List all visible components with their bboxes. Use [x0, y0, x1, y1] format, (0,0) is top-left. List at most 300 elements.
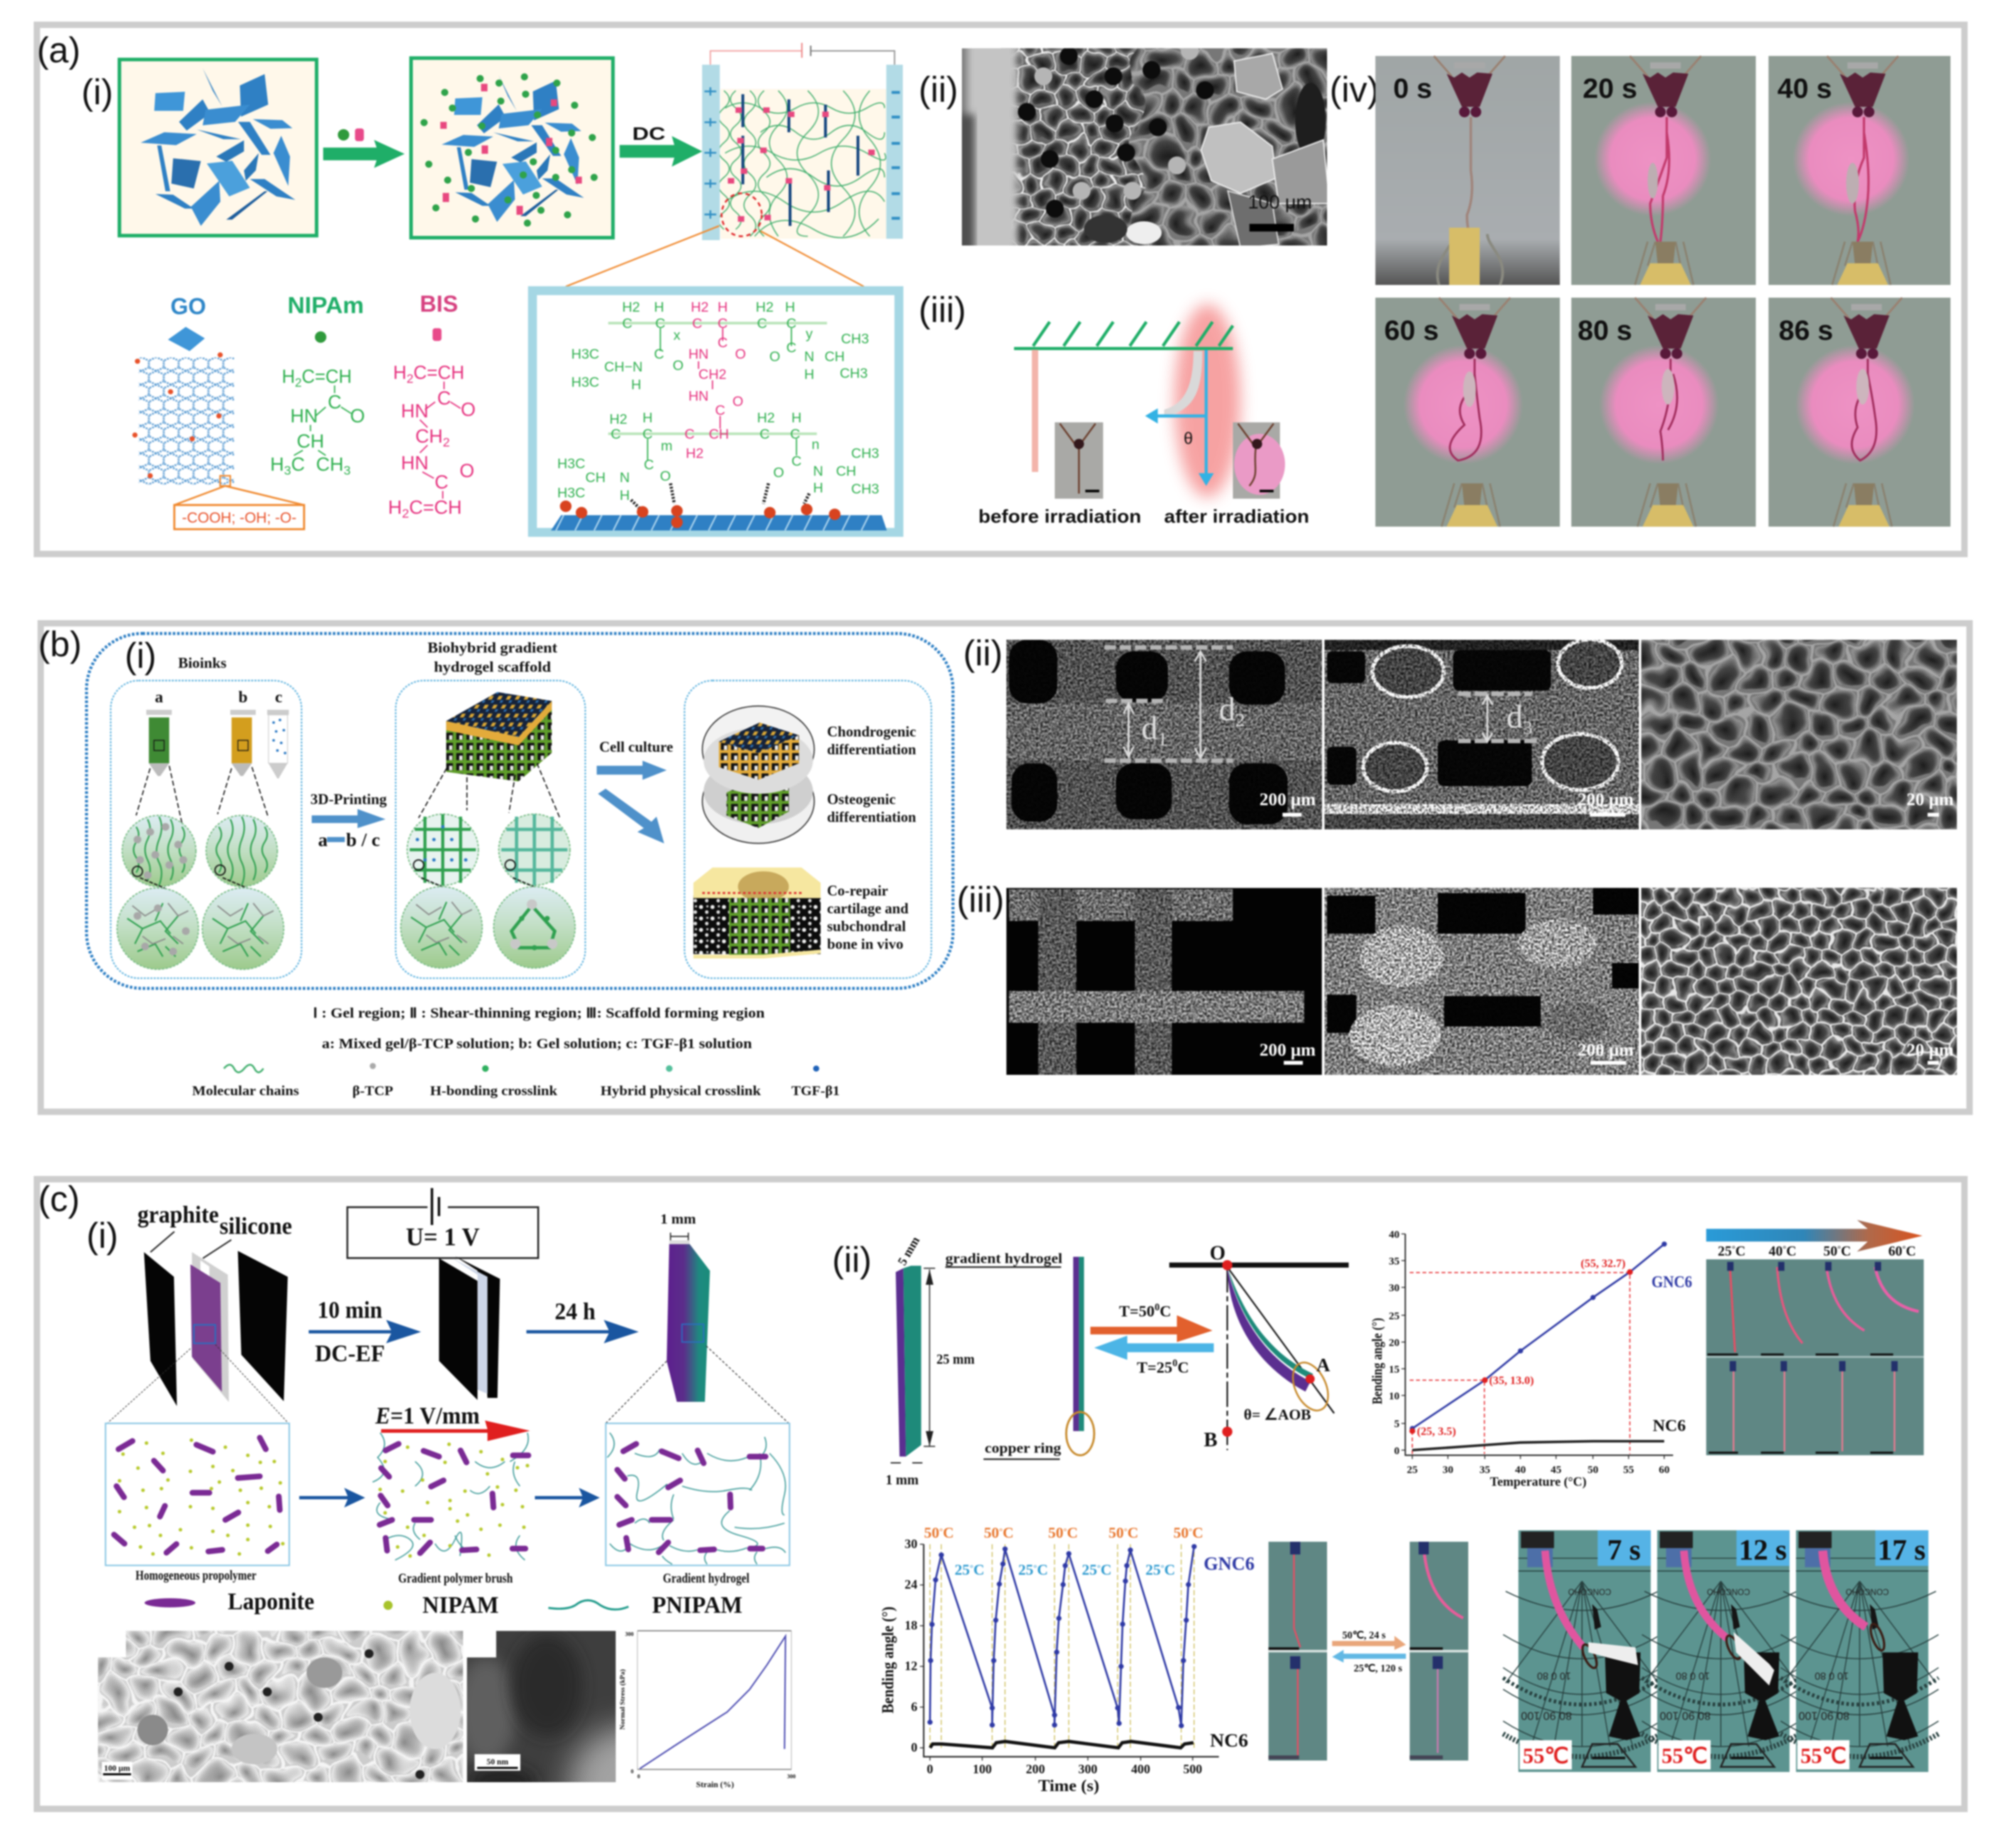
specimen dimensions: [885, 1234, 975, 1488]
arrows: heating and cooling: [1090, 1301, 1214, 1376]
box: crosslinked network on GO sheet: H3C: [557, 485, 585, 501]
diagram: bending under irradiation: [1014, 304, 1285, 499]
scaffold box: [396, 680, 585, 978]
box: crosslinked network on GO sheet: CH: [836, 464, 856, 480]
box: crosslinked network on GO sheet: HN: [688, 389, 709, 404]
stress-strain chart: Strain (%): [696, 1780, 734, 1790]
line chart: cyclic bending angle over time: 400: [1131, 1762, 1150, 1776]
line chart: bending angle vs temperature: 45: [1551, 1464, 1562, 1476]
arrows: heating and cooling: C: [1177, 1358, 1189, 1376]
line chart: cyclic bending angle over time: NC6: [1210, 1729, 1248, 1751]
box: crosslinked network on GO sheet: C: [717, 316, 727, 332]
callout: oxygen functional groups: [174, 505, 304, 529]
line chart: bending angle vs temperature: 55: [1623, 1464, 1634, 1476]
panel a frame: [37, 25, 1964, 554]
arrows: heating and cooling: T=50: [1119, 1302, 1154, 1320]
sub-panel iv label: (iv): [1330, 70, 1379, 110]
structure: BIS: CH: [415, 426, 443, 447]
photo: 20 s: 20 s: [1583, 73, 1637, 105]
box: GO flakes dispersion: [120, 60, 317, 236]
SEM image: scaffold cross-section with dimension: 3: [1523, 717, 1532, 738]
line chart: cyclic bending angle over time: °: [999, 1526, 1003, 1536]
box: crosslinked network on GO sheet: C: [790, 427, 800, 443]
caption: before irradiation: before irradiation: [979, 507, 1142, 527]
photo: 86 s: [1769, 297, 1950, 527]
bending geometry diagram: A: [1316, 1354, 1330, 1376]
arrows: heating and cooling: 0: [1154, 1301, 1159, 1313]
box: crosslinked network on GO sheet: C: [685, 427, 695, 443]
arrows: cell culture: [596, 738, 673, 843]
line chart: cyclic bending angle over time: 24: [905, 1578, 917, 1592]
callout: oxygen functional groups: -COOH; -OH; -O-: [182, 509, 297, 527]
label: 24 h: 24 h: [554, 1299, 596, 1325]
panel b: 3D printed gradient scaffold: [38, 617, 1985, 1112]
line chart: cyclic bending angle over time: C: [1003, 1524, 1014, 1541]
box: crosslinked network on GO sheet: C: [717, 335, 727, 351]
temperature labels: C: [1786, 1243, 1796, 1259]
text: co-repair: cartilage and: [827, 900, 908, 917]
box: crosslinked network on GO sheet: C: [644, 458, 654, 473]
bending geometry diagram: O: [1210, 1242, 1226, 1264]
TEM image: [465, 1630, 617, 1783]
box: crosslinked network on GO sheet: H: [804, 367, 814, 383]
label: BIS: BIS: [420, 291, 458, 317]
gradient hydrogel sheet: 1 mm: [660, 1212, 696, 1227]
box: crosslinked network on GO sheet: C: [643, 427, 653, 443]
box: crosslinked network on GO sheet: H3C: [557, 456, 585, 472]
icon: BIS block: [433, 328, 441, 341]
box: crosslinked network on GO sheet: HN: [688, 347, 709, 362]
temperature labels: °: [1838, 1244, 1841, 1254]
box: crosslinked network on GO sheet: x: [673, 327, 680, 343]
box: crosslinked network on GO sheet: CH−N: [604, 359, 643, 375]
assembly: graphite plates and silicone mould: [108, 1232, 288, 1422]
legend: solutions: a: Mixed gel/β-TCP solution; b: Gel solution; c: TGF-β1 solution: [322, 1036, 752, 1052]
structure: NIPAm: C: [291, 453, 305, 475]
structure: BIS: 2: [406, 371, 414, 386]
line chart: cyclic bending angle over time: C: [1127, 1524, 1138, 1541]
structure: NIPAm: 3: [284, 463, 291, 477]
line chart: cyclic bending angle over time: 50: [1174, 1524, 1189, 1541]
box: crosslinked network on GO sheet: CH: [585, 470, 606, 486]
line chart: bending angle vs temperature: 30: [1443, 1464, 1453, 1476]
SEM image: scaffold top view with dimensions: d: [1219, 692, 1236, 728]
panel a label: (a): [37, 31, 80, 70]
line chart: bending angle vs temperature: (35, 13.0): [1489, 1375, 1534, 1387]
photo: 12 s at 55 C: [1642, 1531, 1800, 1772]
line chart: bending angle vs temperature: 40: [1389, 1228, 1400, 1240]
temperature labels: 60: [1888, 1243, 1902, 1259]
box: crosslinked network on GO sheet: H3C: [572, 347, 599, 362]
box: crosslinked network on GO sheet: O: [660, 469, 671, 485]
line chart: cyclic bending angle over time: °: [939, 1526, 943, 1536]
line chart: bending angle vs temperature: 5: [1394, 1418, 1400, 1430]
stress-strain chart: 300: [787, 1773, 796, 1780]
line chart: bending angle vs temperature: 0: [1394, 1445, 1400, 1457]
temperature labels: C: [1841, 1243, 1851, 1259]
box: crosslinked network on GO sheet: H2: [685, 446, 704, 462]
line chart: cyclic bending angle over time: C: [1067, 1524, 1078, 1541]
SEM image: scaffold cross-section (iii): [1325, 888, 1638, 1075]
bending geometry diagram: θ= ∠AOB: [1244, 1406, 1311, 1423]
structure: BIS: O: [460, 460, 474, 481]
legend: Laponite, NIPAM, PNIPAM: [144, 1588, 742, 1619]
SEM image: pores (iii): 20 μm: [1907, 1041, 1954, 1060]
text: osteogenic differentiation: [827, 791, 916, 825]
line chart: cyclic bending angle over time: 25: [954, 1561, 970, 1578]
box: crosslinked network on GO sheet: H: [643, 410, 653, 426]
box: crosslinked network on GO sheet: C: [693, 316, 702, 332]
line chart: bending angle vs temperature: NC6: [1653, 1417, 1686, 1435]
caption: Homogeneous propolymer: Homogeneous propolymer: [135, 1568, 256, 1583]
structure: NIPAm: 3: [344, 463, 351, 477]
structure: BIS: 2: [402, 507, 409, 521]
SEM image: scaffold top view (iii): 200 μm: [1260, 1041, 1316, 1060]
box: crosslinked network on GO sheet: y: [806, 327, 813, 342]
box: crosslinked network on GO sheet: O: [673, 358, 683, 374]
line chart: cyclic bending angle over time: C: [1164, 1561, 1175, 1578]
text: co-repair: bone in vivo: [827, 936, 903, 953]
line chart: cyclic bending angle over time: 18: [905, 1618, 917, 1632]
line chart: cyclic bending angle over time: C: [943, 1524, 954, 1541]
line chart: bending angle vs temperature: Temperature (°C): [1490, 1474, 1586, 1489]
label: E = 1 V/mm: E=1 V/mm: [374, 1403, 480, 1429]
line chart: cyclic bending angle over time: 200: [1026, 1762, 1045, 1776]
arrows: cell culture: Cell culture: [599, 738, 673, 755]
box: crosslinked network on GO sheet: C: [715, 403, 725, 418]
SEM image: scaffold top view with dimensions: d: [1142, 711, 1158, 747]
arrow: 3D printing: a: [318, 829, 327, 850]
line chart: bending angle vs temperature: 25: [1407, 1464, 1418, 1476]
photos: hot strips: [1410, 1542, 1468, 1760]
box: crosslinked network on GO sheet: CH3: [840, 366, 868, 381]
box: crosslinked network on GO sheet: H: [791, 410, 801, 426]
gradient hydrogel sheet: [606, 1212, 789, 1423]
caption: after irradiation: after irradiation: [1164, 507, 1309, 527]
box: crosslinked network on GO sheet: CH2: [698, 367, 727, 383]
line chart: bending angle vs temperature: [1369, 1228, 1693, 1489]
legend: Laponite, NIPAM, PNIPAM: PNIPAM: [652, 1593, 742, 1619]
box: crosslinked network on GO sheet: H: [813, 480, 823, 496]
sub-panel ii label: (ii): [919, 70, 958, 110]
temperature labels: 50: [1823, 1243, 1838, 1259]
line chart: bending angle vs temperature: 60: [1659, 1464, 1670, 1476]
structure: BIS: H: [388, 497, 402, 518]
box: crosslinked network on GO sheet: N: [813, 464, 823, 480]
structure: BIS: O: [460, 399, 475, 421]
heading: Biohybrid gradient hydrogel scaffold: [428, 639, 558, 675]
photo: 7 s at 55 C: 7 s: [1607, 1533, 1641, 1566]
box: crosslinked network on GO sheet: H2: [691, 300, 709, 315]
SEM image: gradient hydrogel: [97, 1630, 464, 1783]
line chart: bending angle vs temperature: 35: [1389, 1255, 1400, 1267]
line chart: cyclic bending angle over time: 6: [911, 1699, 917, 1714]
structure: BIS: HN: [401, 400, 428, 421]
sub-panel ii label: (ii): [963, 633, 1003, 673]
temperature labels: 25: [1718, 1243, 1732, 1259]
heading: Biohybrid gradient hydrogel scaffold: hydrogel scaffold: [434, 658, 551, 675]
structure: BIS: C=CH: [409, 497, 462, 518]
sub-panel iii label: (iii): [957, 880, 1004, 920]
line chart: cyclic bending angle over time: 0: [911, 1741, 917, 1755]
text: osteogenic differentiation: Osteogenic: [827, 791, 895, 808]
label: NIPAm: NIPAm: [288, 292, 364, 318]
photo: 17 s at 55 C: 17 s: [1878, 1533, 1925, 1566]
legend: components: H-bonding crosslink: [430, 1084, 558, 1099]
box: crosslinked network on GO sheet: H: [785, 300, 795, 315]
icon: GO flake: [168, 327, 205, 351]
box: crosslinked network on GO sheet: CH3: [851, 482, 879, 497]
line chart: cyclic bending angle over time: 50: [924, 1524, 939, 1541]
specimen dimensions: 1 mm: [885, 1472, 919, 1488]
box: crosslinked network on GO sheet: C: [654, 347, 664, 362]
text: chondrogenic differentiation: differentiation: [827, 741, 916, 758]
SEM image: scaffold top view with dimensions: 1: [1158, 729, 1167, 750]
line chart: bending angle vs temperature: 25: [1389, 1310, 1400, 1322]
stress-strain chart: Normal Stress (kPa): [619, 1669, 627, 1730]
stress-strain chart: 0: [637, 1773, 640, 1780]
line chart: cyclic bending angle over time: °: [1033, 1563, 1037, 1573]
SEM image: GO gradient hydrogel cross-section: 100 μm: [1248, 191, 1312, 213]
arrow: 3D printing: 3D-Printing: [310, 791, 387, 808]
line chart: cyclic bending angle over time: °: [1063, 1526, 1067, 1536]
specimen dimensions: 25 mm: [937, 1351, 975, 1367]
arrows: 50 C 24 s / 25 C 120 s: 25℃, 120 s: [1354, 1663, 1402, 1674]
box: crosslinked network on GO sheet: O: [735, 347, 746, 362]
legend: components: Molecular chains: [192, 1084, 299, 1099]
line chart: cyclic bending angle over time: 25: [1082, 1561, 1097, 1578]
line chart: cyclic bending angle over time: °: [1189, 1526, 1192, 1536]
bending geometry diagram: [1169, 1242, 1349, 1452]
SEM image: scaffold top view with dimensions: 200 μm: [1260, 791, 1316, 810]
photo: 40 s: [1769, 56, 1950, 285]
SEM image: scaffold top view with dimensions: 2: [1236, 709, 1245, 731]
sub-panel i label: (i): [81, 73, 113, 112]
legend: components: β-TCP: [352, 1084, 393, 1099]
line chart: bending angle vs temperature: 35: [1480, 1464, 1490, 1476]
inset: gradient hydrogel: [606, 1423, 789, 1565]
arrow: 3D printing: [310, 791, 387, 850]
label: graphite: graphite: [137, 1202, 219, 1228]
sub-panel ii label: (ii): [832, 1240, 872, 1280]
structure: NIPAm: C: [327, 391, 342, 413]
label: 10 min: 10 min: [317, 1297, 382, 1324]
structure: BIS: H: [393, 362, 407, 384]
line chart: cyclic bending angle over time: 50: [1109, 1524, 1124, 1541]
stress-strain chart: 0: [631, 1768, 633, 1775]
structure: BIS: 2: [443, 435, 450, 449]
panel c frame: [37, 1179, 1964, 1809]
box: crosslinked network on GO sheet: N: [620, 470, 630, 486]
diagram: bending under irradiation: θ: [1184, 429, 1193, 448]
structure: BIS: C: [437, 387, 451, 408]
box: crosslinked network on GO sheet: C: [786, 340, 796, 356]
arrow: DC field: [620, 125, 702, 167]
stress-strain chart: [619, 1631, 796, 1790]
bioinks box: b: [238, 688, 248, 707]
panel b frame: [41, 623, 1969, 1112]
arrow: 24 h: [527, 1320, 638, 1343]
structure: NIPAm: O: [350, 405, 365, 426]
line chart: cyclic bending angle over time: C: [1100, 1561, 1112, 1578]
SEM image: scaffold cross-section with dimension: d: [1507, 699, 1523, 736]
photo: 80 s: 80 s: [1578, 315, 1632, 346]
line chart: cyclic bending angle over time: 12: [905, 1659, 917, 1673]
photo: 17 s at 55 C: [1781, 1531, 1939, 1772]
line chart: cyclic bending angle over time: 50: [1048, 1524, 1063, 1541]
heading: Biohybrid gradient hydrogel scaffold: Biohybrid gradient: [428, 639, 558, 656]
text: co-repair: subchondral: [827, 918, 906, 935]
line chart: cyclic bending angle over time: C: [1192, 1524, 1204, 1541]
photo: 60 s: [1375, 297, 1560, 527]
temperature labels: °: [1902, 1244, 1906, 1254]
photo: 0 s: [1375, 56, 1560, 285]
box: crosslinked network on GO sheet: H2: [609, 411, 627, 427]
temperature labels: 40: [1769, 1243, 1783, 1259]
line chart: bending angle vs temperature: (25, 3.5): [1417, 1425, 1456, 1437]
outcome box: [685, 680, 932, 978]
arrows: heating and cooling: T=25: [1137, 1358, 1172, 1376]
box: crosslinked network on GO sheet: C: [759, 427, 769, 443]
box: crosslinked network on GO sheet: m: [661, 438, 673, 454]
line chart: cyclic bending angle over time: 100: [973, 1762, 992, 1776]
line chart: bending angle vs temperature: Bending angle (°): [1369, 1318, 1385, 1405]
box: crosslinked network on GO sheet: N: [804, 349, 814, 365]
panel c: electric-field gradient hydrogel: [37, 1179, 1964, 1848]
box: crosslinked network on GO sheet: CH: [709, 427, 729, 443]
hydrogel strip with copper ring: [945, 1251, 1094, 1460]
line chart: cyclic bending angle over time: 300: [1078, 1762, 1097, 1776]
arrow: 10 min DC-EF: [309, 1320, 421, 1343]
arrow: 3D printing: b / c: [346, 829, 380, 850]
legend: regions: Ⅰ : Gel region; Ⅱ : Shear-thinning region; Ⅲ: Scaffold forming region: [313, 1005, 764, 1021]
bending geometry diagram: B: [1204, 1430, 1217, 1452]
outer dotted frame: [87, 633, 953, 988]
SEM image: gradient hydrogel: 100 μm: [104, 1763, 130, 1773]
text: osteogenic differentiation: differentiation: [827, 808, 916, 825]
electrode cell with gradient network: [566, 43, 902, 287]
photo: 12 s at 55 C: 55℃: [1662, 1744, 1707, 1768]
label: silicone: silicone: [219, 1213, 292, 1240]
icon: NIPAm ball: [315, 332, 327, 343]
circuit: U = 1 V: [347, 1188, 538, 1258]
photo: 12 s at 55 C: 12 s: [1739, 1533, 1786, 1566]
sub-panel iii label: (iii): [919, 290, 966, 329]
panel c label: (c): [38, 1179, 80, 1219]
box: crosslinked network on GO sheet: C: [622, 316, 632, 332]
box: crosslinked network on GO sheet: H3C: [572, 374, 599, 390]
line chart: cyclic bending angle over time: °: [970, 1563, 974, 1573]
panel a: hydrogel fabrication and actuation: [37, 25, 1964, 554]
arrow: temperature gradient: [1706, 1220, 1922, 1252]
legend: components: [192, 1063, 840, 1099]
label: GO: GO: [171, 294, 206, 320]
arrow: add monomer: [323, 129, 404, 168]
hydrogel strip with copper ring: gradient hydrogel: [945, 1251, 1063, 1267]
SEM image: scaffold top view (iii): [1006, 888, 1322, 1075]
photo: 17 s at 55 C: 55℃: [1801, 1744, 1846, 1768]
specimen dimensions: 5 mm: [895, 1234, 922, 1268]
arrows: 50 C 24 s / 25 C 120 s: [1332, 1630, 1406, 1674]
box: crosslinked network on GO sheet: H: [654, 300, 664, 315]
box: crosslinked network on GO sheet: H: [620, 488, 630, 504]
box: crosslinked network on GO sheet: O: [773, 465, 784, 480]
heading: Bioinks: Bioinks: [178, 655, 226, 672]
TEM image: 50 nm: [487, 1757, 509, 1766]
line chart: cyclic bending angle over time: C: [1037, 1561, 1048, 1578]
box: crosslinked network on GO sheet: CH: [824, 349, 845, 365]
box: crosslinked network on GO sheet: H2: [756, 300, 774, 315]
SEM image: scaffold cross-section with dimension: [1325, 640, 1638, 830]
box: crosslinked network on GO sheet: H: [717, 300, 727, 315]
structure: BIS: C: [435, 471, 448, 492]
box: crosslinked network on GO sheet: O: [732, 394, 743, 409]
box: crosslinked network on GO sheet: n: [811, 437, 819, 453]
line chart: cyclic bending angle over time: Time (s): [1038, 1777, 1100, 1795]
box: crosslinked network on GO sheet: CH3: [851, 446, 879, 462]
text: co-repair: [827, 882, 908, 953]
arrow: DC field: DC: [632, 125, 665, 144]
box: crosslinked network on GO sheet: H2: [622, 300, 640, 315]
box: crosslinked network on GO sheet: C: [656, 316, 665, 332]
photo: 60 s: 60 s: [1384, 315, 1438, 346]
bioinks box: c: [275, 688, 283, 707]
temperature labels: C: [1906, 1243, 1916, 1259]
line chart: cyclic bending angle over time: 25: [1018, 1561, 1033, 1578]
photo: 40 s: 40 s: [1777, 73, 1832, 105]
box: crosslinked network on GO sheet: [532, 290, 899, 532]
SEM image: scaffold top view with dimensions: [1006, 640, 1322, 830]
structure: NIPAm: CH: [297, 431, 325, 452]
line chart: cyclic bending angle over time: °: [1097, 1563, 1100, 1573]
line chart: bending angle vs temperature: 50: [1588, 1464, 1599, 1476]
SEM image: scaffold cross-section with dimension: 200 μm: [1578, 791, 1634, 810]
structure: NIPAm: 2: [295, 375, 302, 389]
line chart: cyclic bending angle over time: [879, 1524, 1255, 1795]
text: chondrogenic differentiation: Chondrogenic: [827, 723, 916, 740]
box: crosslinked network on GO sheet: O: [769, 349, 780, 365]
line chart: bending angle vs temperature: 30: [1389, 1282, 1400, 1294]
line chart: cyclic bending angle over time: 50: [984, 1524, 999, 1541]
photo: 0 s: 0 s: [1393, 73, 1432, 105]
circuit: U = 1 V: U= 1 V: [406, 1223, 480, 1251]
box: crosslinked network on GO sheet: C: [757, 316, 767, 332]
SEM image: GO gradient hydrogel cross-section: [961, 47, 1328, 247]
photos: cold strips: [1268, 1542, 1327, 1760]
stress-strain chart: 300: [625, 1631, 633, 1637]
caption: Gradient polymer brush: Gradient polymer brush: [399, 1571, 513, 1586]
structure: NIPAm: [270, 366, 365, 477]
SEM image: scaffold cross-section (iii): 200 μm: [1578, 1041, 1634, 1060]
graphene oxide lattice: [135, 355, 304, 505]
temperature labels: [1718, 1243, 1916, 1259]
line chart: bending angle vs temperature: (55, 32.7): [1581, 1257, 1626, 1269]
structure: NIPAm: C=CH: [302, 366, 352, 387]
line chart: cyclic bending angle over time: 25: [1145, 1561, 1161, 1578]
box: crosslinked network on GO sheet: C: [611, 427, 621, 443]
box: crosslinked network on GO sheet: C: [786, 316, 796, 332]
arrows: heating and cooling: 0: [1172, 1358, 1177, 1369]
bioinks box: [111, 680, 302, 978]
line chart: bending angle vs temperature: 10: [1389, 1390, 1400, 1402]
box: GO with NIPAm and BIS: [411, 58, 613, 238]
legend: Laponite, NIPAM, PNIPAM: NIPAM: [422, 1593, 499, 1619]
temperature labels: °: [1732, 1244, 1735, 1254]
line chart: cyclic bending angle over time: GNC6: [1204, 1553, 1255, 1574]
photo: 20 s: [1572, 56, 1756, 285]
SEM image: pores (iii): [1640, 887, 1959, 1076]
arrows: heating and cooling: C: [1159, 1302, 1171, 1320]
